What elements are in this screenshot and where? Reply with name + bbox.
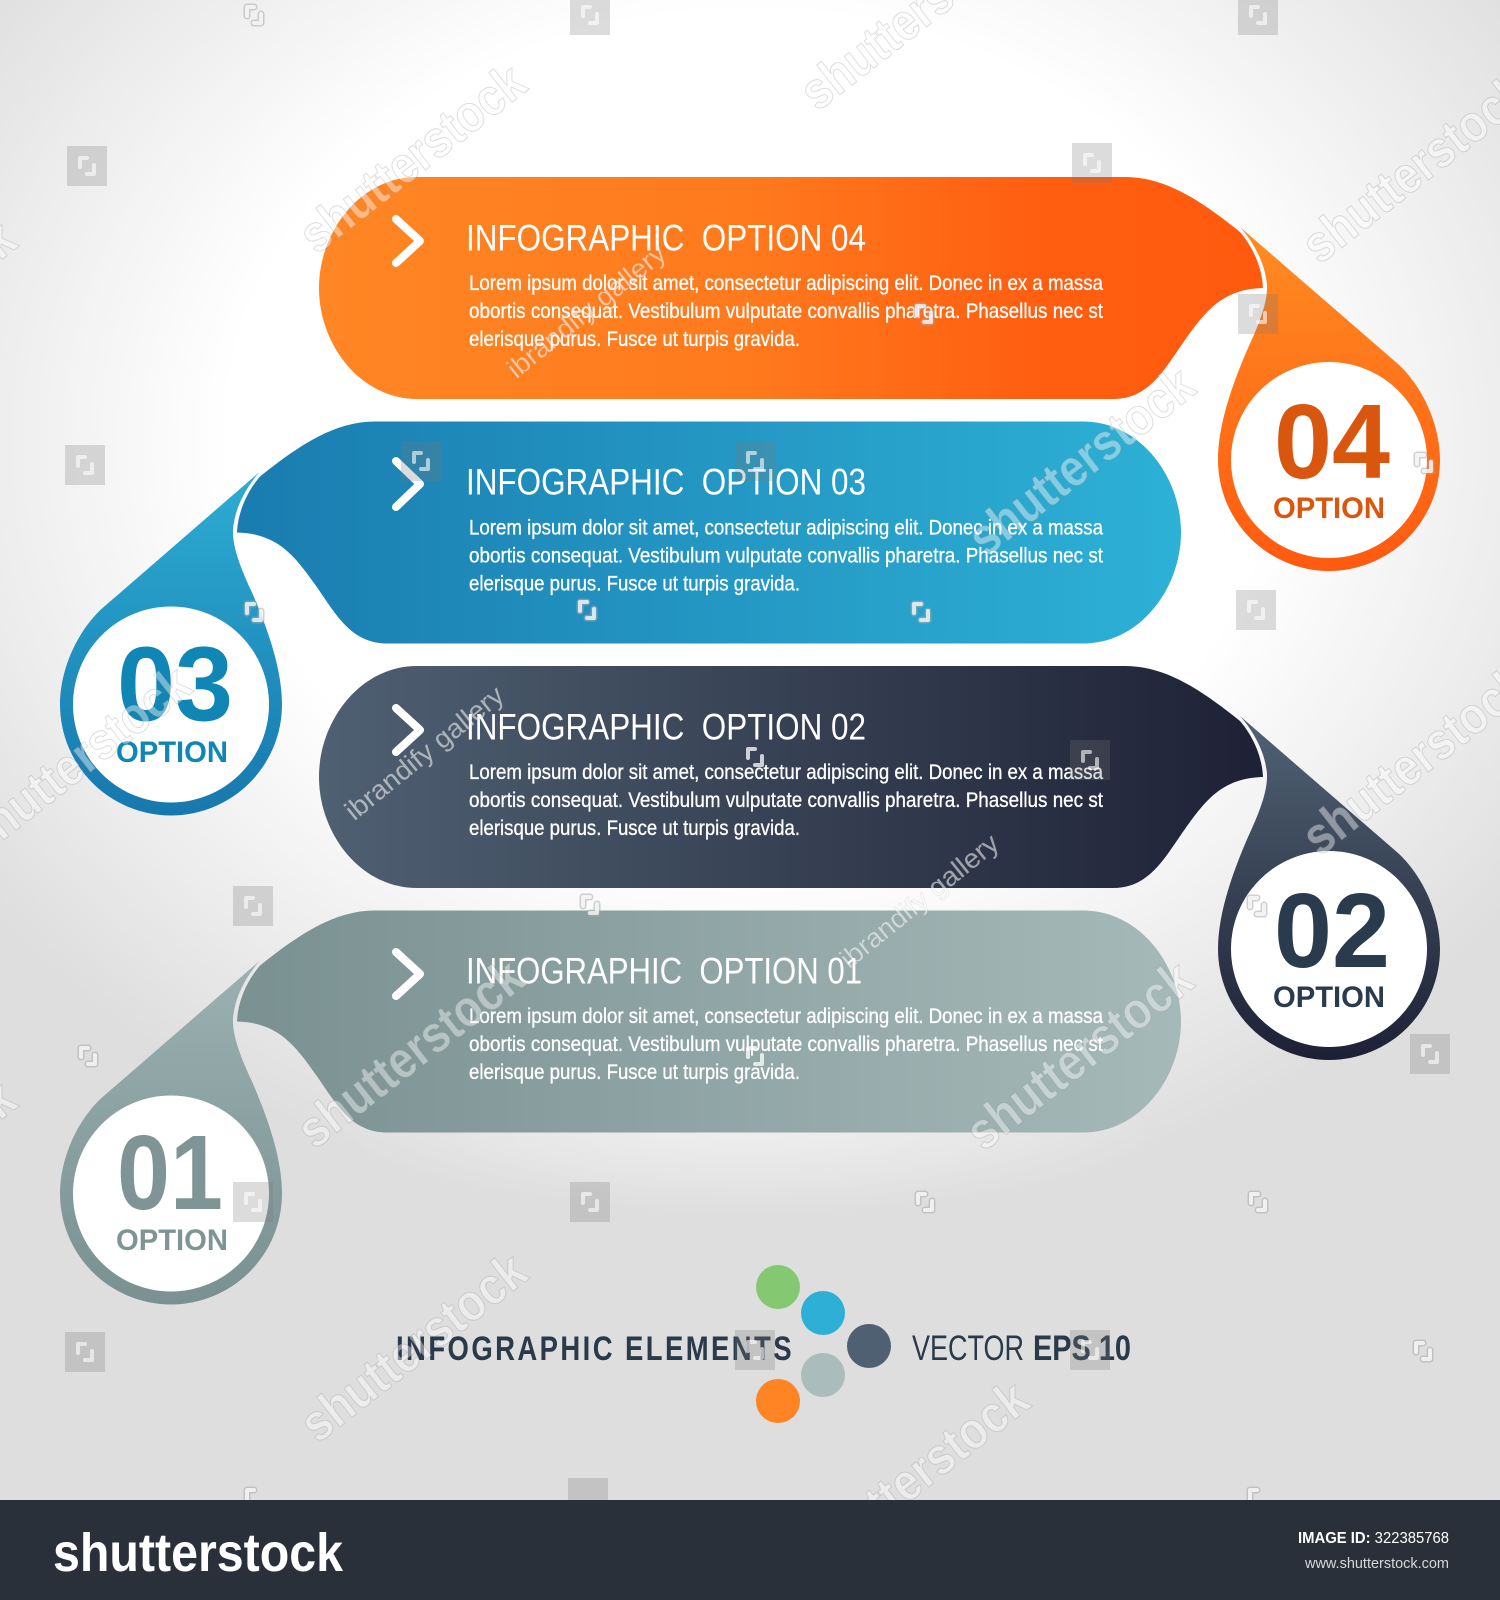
ribbon: option 04 [319,177,1263,399]
text block: option 03: elerisque purus. Fusce ut turpis gravida. [469,572,800,596]
teardrop badge: option 04: 04 [1274,383,1390,501]
panel: option 01 [60,910,1181,1304]
text block: option 02 [469,761,1103,840]
heading: option 03: INFOGRAPHIC OPTION 03 [466,462,866,502]
heading: option 04: INFOGRAPHIC OPTION 04 [466,218,866,258]
text block: option 02: Lorem ipsum dolor sit amet, consectetur adipiscing elit. Donec in ex a massa [469,761,1103,784]
watermark: shutterstock text: shutterstock [957,356,1206,568]
watermark: shutterstock text: shutterstock [288,53,537,265]
heading: option 02: INFOGRAPHIC OPTION 02 [466,706,866,748]
text block: option 04: elerisque purus. Fusce ut turpis gravida. [469,328,800,351]
heading: option 01: INFOGRAPHIC OPTION 01 [466,950,862,992]
panel: option 02 [319,666,1440,1060]
panel: option 03 [60,422,1181,816]
watermark: shutterstock text: shutterstock [286,948,535,1160]
watermark: gallery text: ibrandify gallery [339,680,510,826]
teardrop badge: option 03: 03 [117,626,233,744]
ribbon: option 03 [237,422,1181,644]
watermark: shutterstock text: shutterstock [289,1242,538,1454]
teardrop badge: option 04: OPTION [1273,492,1385,525]
caption: infographic elements: INFOGRAPHIC ELEMENTS [396,1330,794,1368]
text block: option 01: obortis consequat. Vestibulum vulputate convallis pharetra. Phasellus nec st [469,1033,1103,1056]
text block: option 02: obortis consequat. Vestibulum vulputate convallis pharetra. Phasellus nec st [469,789,1103,812]
teardrop badge: option 01 [60,960,282,1304]
teardrop badge: option 02: 02 [1274,872,1390,990]
watermark: gallery text: ibrandify gallery [834,828,1005,974]
caption: vector eps 10: EPS 10 [1033,1329,1131,1368]
teardrop badge: option 02: OPTION [1273,981,1385,1014]
teardrop badge: option 02 [1218,716,1440,1060]
icon: colored dots [756,1265,891,1423]
watermark: shutterstock text: shutterstock [955,950,1204,1162]
text block: option 03: Lorem ipsum dolor sit amet, consectetur adipiscing elit. Donec in ex a massa [469,516,1103,540]
footer logo: shutterstock [53,1523,344,1583]
caption: vector eps 10 [912,1329,1131,1368]
teardrop badge: option 03 [60,472,282,816]
teardrop badge: option 01: 01 [117,1114,223,1232]
icon: chevron 04 [396,219,420,263]
ribbon: option 01 [237,910,1181,1132]
text block: option 03 [469,516,1103,596]
text block: option 01 [469,1005,1103,1084]
icon: chevron 03 [396,461,420,507]
footer bar [0,1500,1500,1600]
teardrop badge: option 01: OPTION [116,1224,228,1257]
watermark: shutterstock text: shutterstock [791,1370,1040,1582]
text block: option 01: Lorem ipsum dolor sit amet, consectetur adipiscing elit. Donec in ex a massa [469,1005,1103,1028]
icon: chevron 02 [396,708,420,752]
ribbon: option 02 [319,666,1263,888]
teardrop badge: option 03: OPTION [116,736,228,769]
footer url: www.shutterstock.com [1304,1555,1449,1572]
icon: chevron 01 [396,952,420,996]
watermark: gallery text: ibrandify gallery [501,238,672,384]
caption: vector eps 10: VECTOR [912,1329,1024,1368]
text block: option 01: elerisque purus. Fusce ut turpis gravida. [469,1061,800,1084]
watermark: gallery text [339,238,1005,974]
text block: option 04 [469,272,1103,351]
teardrop badge: option 04 [1218,227,1440,571]
text block: option 02: elerisque purus. Fusce ut turpis gravida. [469,817,800,840]
text block: option 04: obortis consequat. Vestibulum vulputate convallis pharetra. Phasellus nec st [469,300,1103,323]
text block: option 04: Lorem ipsum dolor sit amet, consectetur adipiscing elit. Donec in ex a massa [469,272,1103,295]
text block: option 03: obortis consequat. Vestibulum vulputate convallis pharetra. Phasellus nec st [469,544,1103,568]
panel: option 04 [319,177,1440,571]
footer image id: IMAGE ID: 322385768 [1298,1530,1449,1547]
